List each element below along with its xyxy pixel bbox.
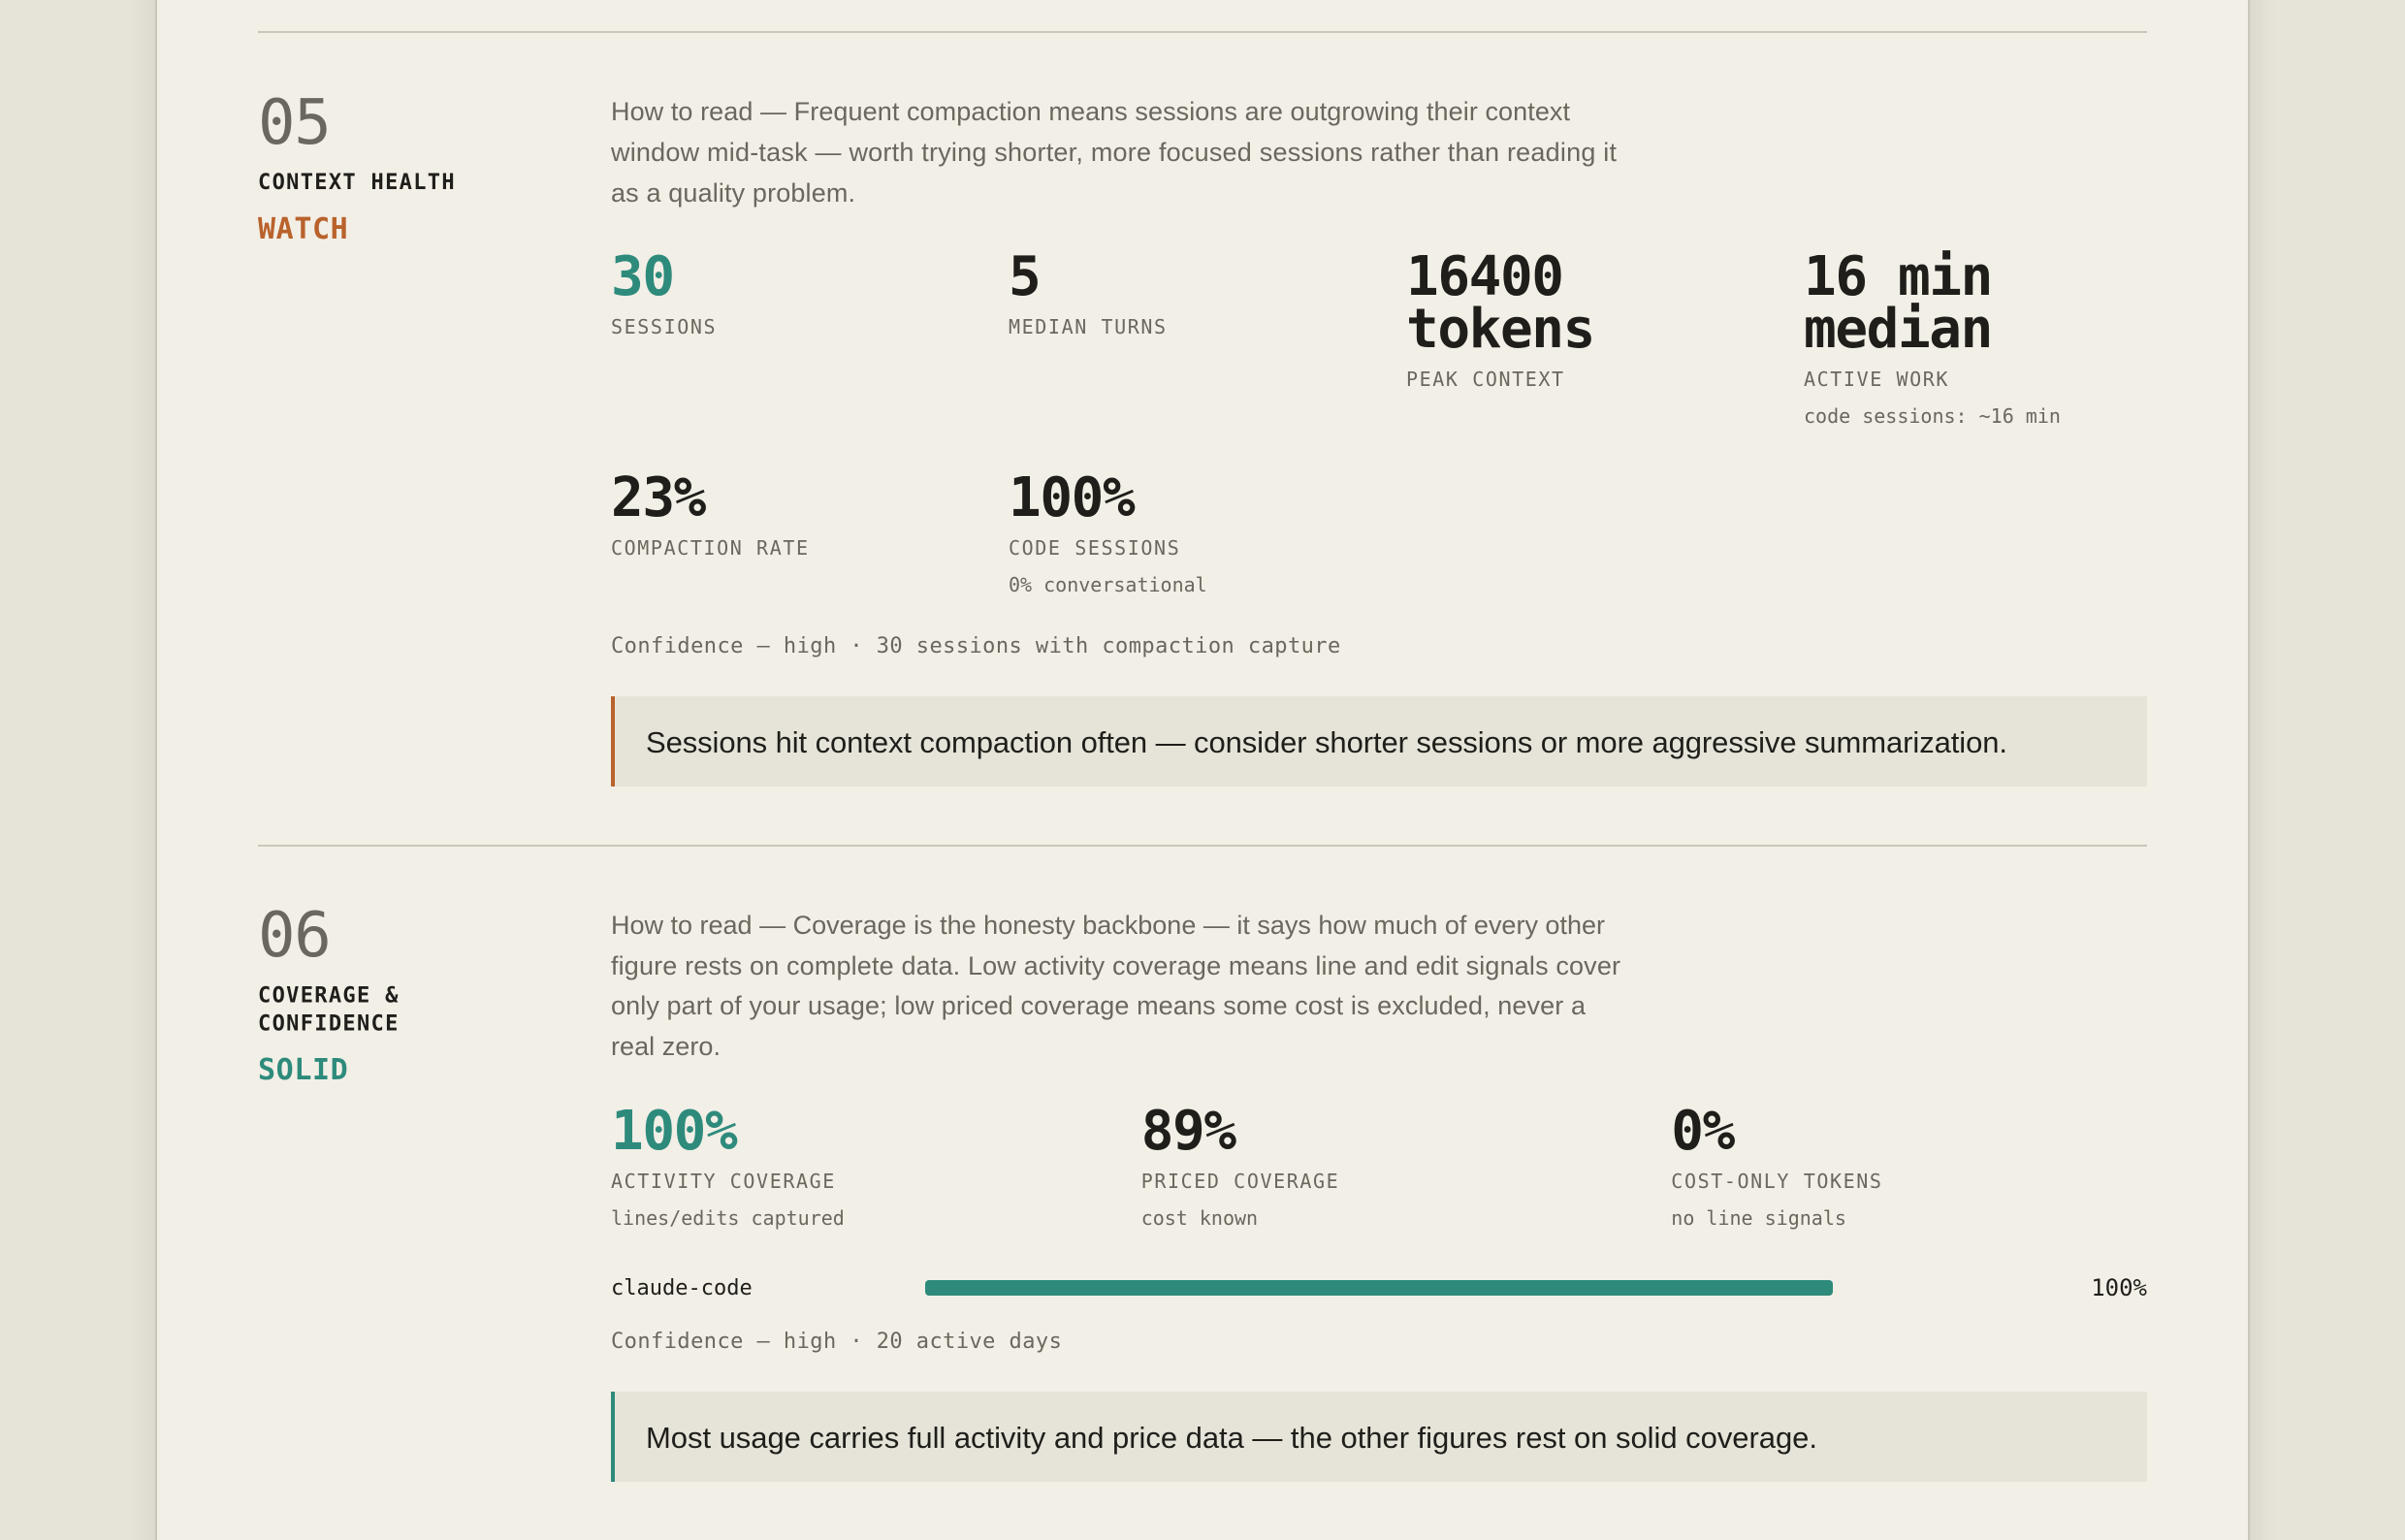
stat: sessions: SESSIONS: [611, 315, 717, 338]
stat: peak context: [1406, 245, 1594, 391]
section 06 heading: [258, 900, 400, 1087]
stat: cost-only tokens: [1671, 1100, 1883, 1230]
how to read text 05: How to read — Frequent compaction means sessions are outgrowing their context: [611, 97, 1570, 126]
section 06 heading: CONFIDENCE: [258, 1012, 400, 1036]
callout 06: [611, 1392, 2147, 1482]
stat: activity coverage: 100%: [611, 1100, 738, 1163]
panel: section 05 context health: [258, 87, 2147, 786]
stat: cost-only tokens: COST-ONLY TOKENS: [1671, 1170, 1883, 1193]
panel: section 06 coverage and confidence: [258, 900, 2148, 1482]
how to read text 05: window mid-task — worth trying shorter, more focused sessions rather than reading it: [610, 138, 1617, 167]
section 06 heading: SOLID: [258, 1053, 348, 1087]
callout 05: Sessions hit context compaction often — consider shorter sessions or more aggressive summarization.: [646, 725, 2007, 759]
how to read text 06: figure rests on complete data. Low activity coverage means line and edit signals cover: [611, 951, 1620, 980]
stat: compaction rate: 23%: [611, 466, 707, 529]
section 05 heading: [258, 87, 456, 246]
section 05 heading: 05: [258, 87, 331, 159]
how to read text 06: [611, 911, 1620, 1061]
stat: active work: 16 min: [1804, 245, 1992, 308]
stat: priced coverage: [1141, 1100, 1339, 1230]
stat: active work: median: [1804, 298, 1992, 361]
callout 06: Most usage carries full activity and price data — the other figures rest on solid coverage.: [646, 1421, 1817, 1455]
stat: activity coverage: [611, 1100, 845, 1230]
stat: priced coverage: PRICED COVERAGE: [1141, 1170, 1339, 1193]
stat: active work: code sessions: ~16 min: [1804, 404, 2061, 428]
confidence note 06: Confidence — high · 20 active days: [611, 1330, 1062, 1354]
stat: cost-only tokens: 0%: [1671, 1100, 1736, 1163]
bar chart: claude-code coverage: 100%: [2091, 1274, 2148, 1301]
bar chart: claude-code coverage: claude-code: [611, 1276, 753, 1300]
section 05 heading: CONTEXT HEALTH: [258, 171, 456, 195]
how to read text 06: How to read — Coverage is the honesty backbone — it says how much of every other: [611, 911, 1605, 940]
stat: activity coverage: ACTIVITY COVERAGE: [611, 1170, 836, 1193]
stat: sessions: [611, 245, 717, 338]
section 05 heading: WATCH: [258, 212, 348, 246]
stat: median turns: 5: [1009, 245, 1040, 308]
how to read text 06: real zero.: [611, 1032, 721, 1061]
stat: peak context: tokens: [1406, 298, 1594, 361]
how to read text 06: only part of your usage; low priced coverage means some cost is excluded, never a: [611, 991, 1587, 1020]
stat: code sessions: 0% conversational: [1009, 573, 1207, 596]
stat: active work: [1804, 245, 2061, 428]
stat: code sessions: [1009, 466, 1207, 596]
stat: compaction rate: COMPACTION RATE: [611, 536, 810, 560]
stat: peak context: 16400: [1406, 245, 1563, 308]
stat: priced coverage: 89%: [1141, 1100, 1236, 1163]
stat: cost-only tokens: no line signals: [1671, 1206, 1846, 1230]
how to read text 05: [610, 97, 1617, 208]
section 06 heading: 06: [258, 900, 331, 972]
stat: priced coverage: cost known: [1141, 1206, 1258, 1230]
stat: median turns: MEDIAN TURNS: [1009, 315, 1168, 338]
how to read text 05: as a quality problem.: [611, 178, 855, 208]
stat: compaction rate: [611, 466, 810, 560]
stat: sessions: 30: [611, 245, 674, 308]
callout 05: [611, 696, 2147, 786]
stat: activity coverage: lines/edits captured: [611, 1206, 845, 1230]
section 06 heading: COVERAGE &: [258, 983, 400, 1009]
stat: median turns: [1009, 245, 1168, 338]
bar chart: claude-code coverage: [611, 1274, 2148, 1301]
confidence note 05: Confidence — high · 30 sessions with compaction capture: [611, 634, 1341, 658]
stat: peak context: PEAK CONTEXT: [1406, 368, 1565, 391]
stat: code sessions: 100%: [1009, 466, 1136, 529]
stat: code sessions: CODE SESSIONS: [1009, 536, 1180, 560]
stat: active work: ACTIVE WORK: [1804, 368, 1949, 391]
